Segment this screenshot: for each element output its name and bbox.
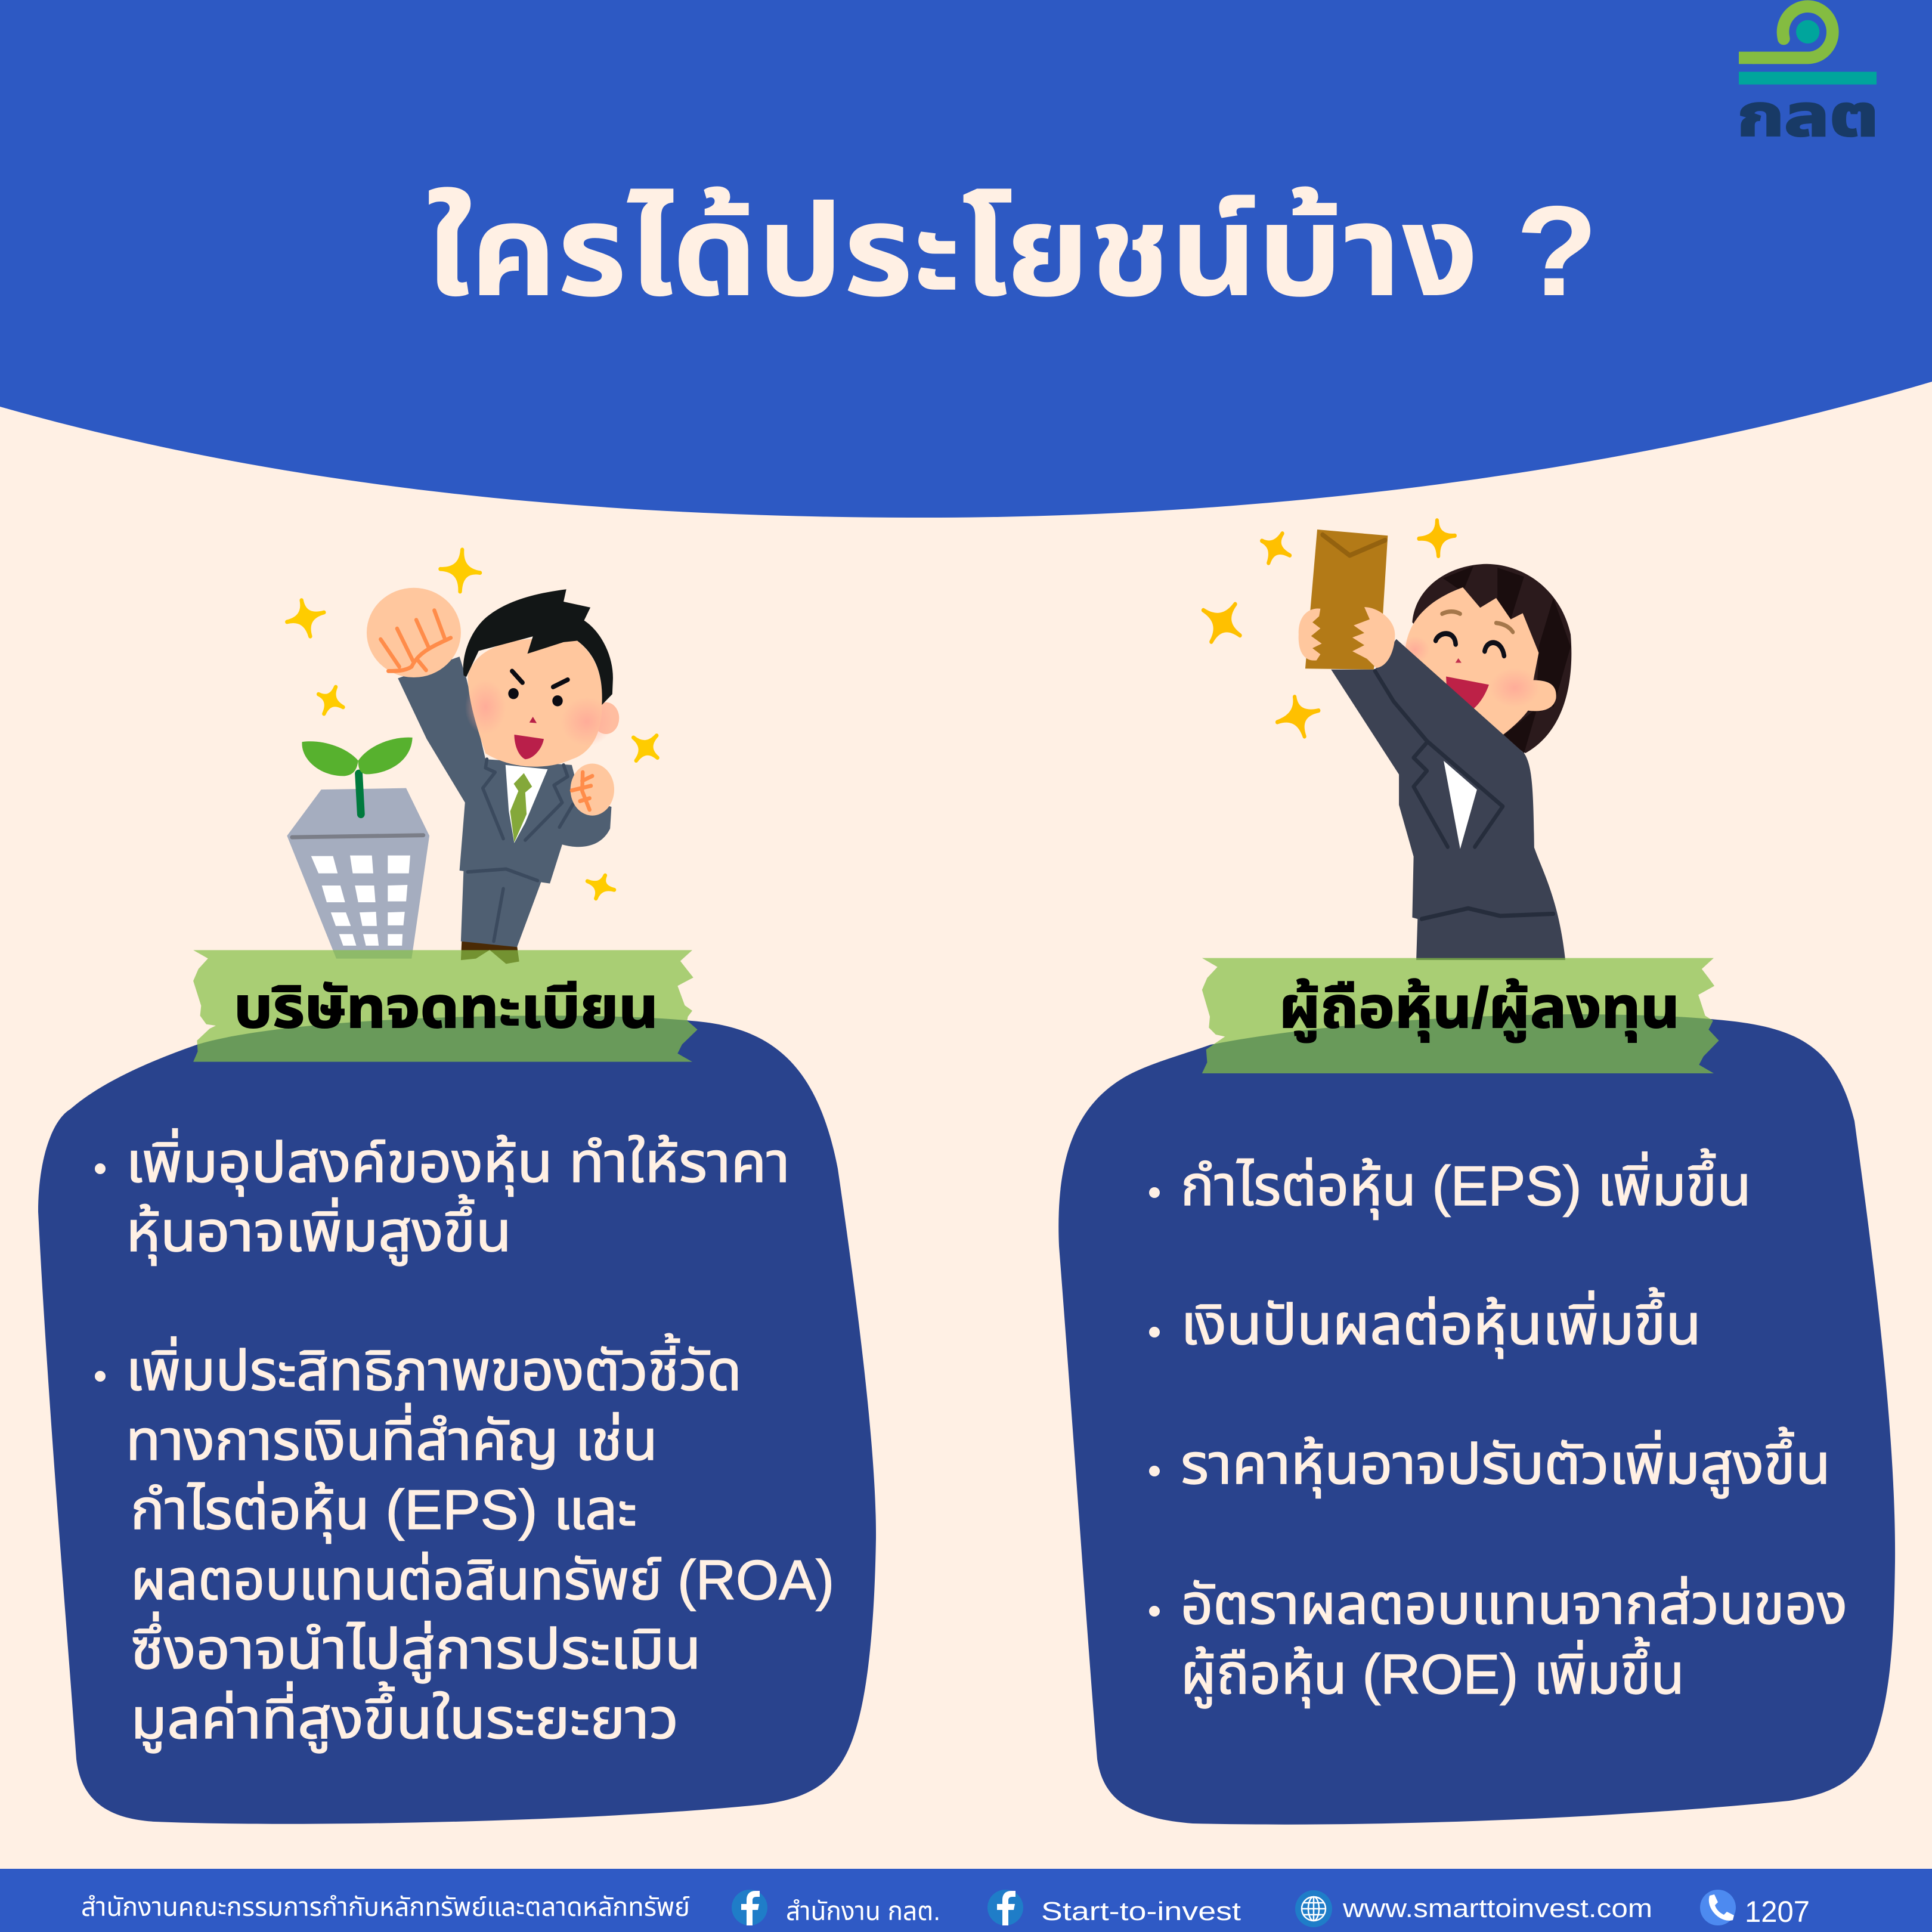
text block: listed company benefits: ซึ่งอาจนำไปสู่การประเมิน [131, 1612, 701, 1683]
text block: listed company benefits: ผลตอบแทนต่อสินทรัพย์ (ROA) [131, 1549, 834, 1611]
text block: shareholder benefits: เงินปันผลต่อหุ้นเพิ่มขึ้น [1181, 1287, 1701, 1359]
logo: SEC Thailand: กลต [1737, 84, 1879, 148]
icon: globe [1295, 1890, 1332, 1927]
footer: hotline: 1207 [1745, 1895, 1810, 1928]
text block: listed company benefits: ทางการเงินที่สำคัญ เช่น [126, 1403, 658, 1472]
footer: facebook start-to-invest: Start-to-invest [1041, 1897, 1241, 1926]
header banner [0, 0, 1932, 518]
text block: shareholder benefits [1149, 1148, 1847, 1708]
icon: facebook [987, 1890, 1023, 1925]
icon: phone [1700, 1890, 1736, 1925]
footer: website: www.smarttoinvest.com [1342, 1894, 1652, 1923]
text block: listed company benefits: หุ้นอาจเพิ่มสูงขึ้น [126, 1194, 512, 1266]
icon: building [287, 788, 429, 959]
text block: shareholder benefits: กำไรต่อหุ้น (EPS) เพิ่มขึ้น [1181, 1148, 1751, 1220]
text block: listed company benefits: เพิ่มอุปสงค์ของหุ้น ทำให้ราคา [126, 1129, 790, 1197]
illustration: businessman with building and sprout [287, 550, 658, 964]
title: ใครได้ประโยชน์บ้าง ? [426, 179, 1598, 323]
green tape: listed company [193, 950, 698, 1062]
heading: shareholders and investors: ผู้ถือหุ้น/ผู้ลงทุน [1279, 976, 1680, 1042]
icon: facebook [732, 1890, 767, 1925]
text block: shareholder benefits: อัตราผลตอบแทนจากส่วนของ [1181, 1573, 1847, 1636]
icon: businesswoman [1299, 564, 1571, 960]
icon: businessman [367, 588, 619, 964]
text block: listed company benefits [95, 1129, 834, 1753]
green tape: shareholders [1202, 958, 1719, 1073]
panel: shareholder blob [1058, 1014, 1895, 1825]
text block: shareholder benefits: ราคาหุ้นอาจปรับตัวเพิ่มสูงขึ้น [1181, 1427, 1831, 1498]
footer bar [0, 1869, 1932, 1932]
icon: sparkles [1203, 521, 1455, 736]
footer: organisation name: สำนักงานคณะกรรมการกำกับหลักทรัพย์และตลาดหลักทรัพย์ [81, 1893, 690, 1922]
icon: envelope [1305, 530, 1388, 670]
illustration: businesswoman holding envelope [1203, 521, 1571, 960]
text block: listed company benefits: เพิ่มประสิทธิภาพของตัวชี้วัด [126, 1333, 742, 1402]
text block: listed company benefits: กำไรต่อหุ้น (EPS) และ [131, 1478, 637, 1544]
footer: facebook SEC: สำนักงาน กลต. [786, 1897, 940, 1926]
text block: shareholder benefits: ผู้ถือหุ้น (ROE) เพิ่มขึ้น [1181, 1637, 1685, 1708]
icon: sparkles [287, 550, 658, 899]
heading: listed company: บริษัทจดทะเบียน [234, 976, 658, 1040]
panel: listed company blob [38, 1015, 876, 1824]
logo: SEC Thailand [1737, 7, 1879, 148]
icon: sprout [302, 738, 413, 814]
text block: listed company benefits: มูลค่าที่สูงขึ้นในระยะยาว [131, 1682, 679, 1753]
